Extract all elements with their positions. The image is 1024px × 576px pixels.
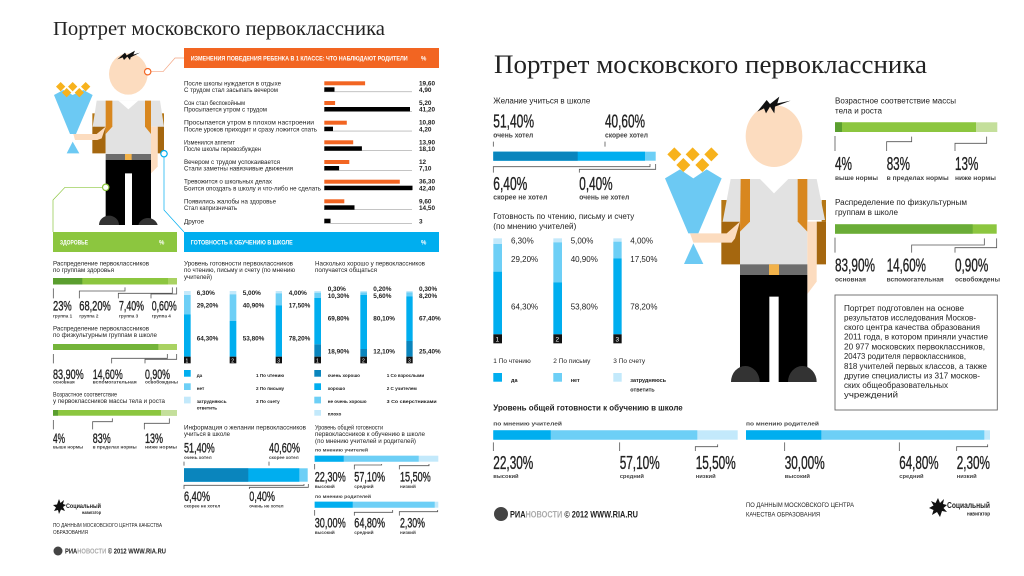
panel: desire to study right [493,96,656,202]
chart: behaviour changes bars: Стали заметны навязчивые движения [184,166,293,173]
chart: communication skills: хорошо [328,386,345,391]
illustration: right schoolboy [665,97,826,382]
panel: desire to study left: учиться в школе [184,431,231,438]
chart: literacy readiness right: ответить [630,388,655,394]
chart: behaviour changes bars: 13,90 [419,139,435,146]
panel: body mass conformity right: 4% [835,154,852,174]
chart: communication skills: 25,40% [419,348,441,356]
panel: physical education groups: основная [53,380,75,385]
panel: physical education groups right: освобождены [955,277,1000,284]
chart: literacy readiness left: да [197,373,203,378]
logo: social navigator left: навигатор [82,510,101,515]
panel: physical education groups right: вспомогательная [887,278,944,284]
chart: behaviour changes bars: После уроков приходит и сразу ложится спать [184,126,317,133]
chart: literacy readiness right: Готовность по чтению, письму и счету [493,212,634,221]
panel: overall readiness left: 2,30% [400,515,425,531]
panel: health groups: группа 4 [152,313,171,318]
chart: literacy readiness left: 17,50% [289,303,311,310]
text box: study description: Портрет подготовлен на основе [844,303,964,313]
chart: communication skills: 0,20% [373,286,392,293]
panel: desire to study left: 51,40% [184,439,215,455]
chart: literacy readiness left: 3 По счету [256,399,280,404]
panel: overall readiness left: средний [354,483,374,489]
panel: desire to study right: 0,40% [579,174,613,194]
header: readiness: ГОТОВНОСТЬ К ОБУЧЕНИЮ В ШКОЛЕ [191,240,293,246]
chart: parents opinion: высокий [785,473,810,480]
chart: literacy readiness left [184,260,311,410]
chart: communication skills: 3 [408,358,411,364]
chart: communication skills: 0,30% [419,286,437,293]
chart: communication skills: 5,60% [373,293,392,300]
chart: literacy readiness right: затрудняюсь [630,378,667,384]
logo: social navigator right [929,498,991,518]
chart: literacy readiness right: 40,90% [571,255,598,264]
chart: parents opinion: 2,30% [957,453,990,473]
chart: literacy readiness right: 1 [496,336,500,344]
panel: overall readiness left: (по мнению учителей и родителей) [315,438,416,445]
chart: teachers opinion: по мнению учителей [493,420,562,427]
chart: parents opinion: средний [899,473,924,480]
chart: behaviour changes bars: 18,10 [419,146,435,153]
panel: health groups: 7,40% [119,298,144,314]
logo: RIA left: РИАНОВОСТИ © 2012 WWW.RIA.RU [65,548,166,556]
source note left: ОБРАЗОВАНИЯ [53,530,88,536]
source note left: ПО ДАННЫМ МОСКОВСКОГО ЦЕНТРА КАЧЕСТВА [53,523,163,529]
chart: literacy readiness right: 6,30% [511,236,534,246]
chart: communication skills: 2 [362,358,365,364]
panel: desire to study left: 40,60% [269,439,300,455]
panel: desire to study right: очень не хотел [579,192,630,202]
text box: study description: учреждений [844,389,898,399]
panel: physical education groups [53,326,178,385]
header: health [53,232,177,252]
chart: teachers opinion: низкий [696,473,716,480]
panel: physical education groups: вспомогательная [93,380,137,385]
title: right panel: Портрет московского первоклассника [494,50,927,79]
panel: body mass conformity [53,392,177,450]
chart: literacy readiness right: 29,20% [511,255,538,264]
panel: health groups: 68,20% [79,298,111,314]
chart: communication skills: 2 С учителем [387,386,417,391]
panel: desire to study right: скорее хотел [605,130,648,139]
chart: behaviour changes bars: Тревожится о школьных делах [184,179,273,186]
chart: behaviour changes bars: 4,90 [419,87,432,94]
chart: teachers opinion: 22,30% [493,453,533,473]
panel: physical education groups right: 0,90% [955,256,988,276]
panel: desire to study left: очень хотел [184,455,212,460]
chart: literacy readiness left: 1 По чтению [256,373,284,378]
chart: behaviour changes bars: 14,50 [419,205,435,212]
chart: behaviour changes bars: 36,30 [419,179,435,186]
chart: behaviour changes bars: Вечером с трудом успокаивается [184,159,280,166]
illustration: left schoolboy [54,51,164,225]
chart: communication skills: 8,20% [419,293,437,300]
panel: physical education groups: Распределение первоклассников [53,326,150,333]
chart: literacy readiness left: 2 По письму [256,386,285,391]
chart: literacy readiness left: Уровень готовности первоклассников [184,260,294,268]
panel: health groups: 23% [53,298,72,314]
logo: social navigator left [53,499,101,515]
chart: behaviour changes bars: Боится опоздать в школу и что-либо не сделать [184,185,321,192]
chart: communication skills: 69,80% [328,316,350,322]
chart: behaviour changes bars: После школы нуждается в отдыхе [184,80,282,87]
chart: communication skills: 10,30% [328,293,350,300]
chart: parents opinion: низкий [957,473,977,480]
text box: study description: 20473 родителя первоклассников, [844,351,966,361]
chart: behaviour changes bars: После школы перевозбужден [184,146,261,153]
chart: literacy readiness right: 53,80% [571,302,598,312]
chart: literacy readiness left: ответить [197,406,217,410]
chart: behaviour changes bars: Сон стал беспокойным [184,100,245,107]
panel: physical education groups right: группам в школе [835,208,899,217]
panel: body mass conformity: 4% [53,430,65,446]
chart: behaviour changes bars: Просыпается утром в плохом настроении [184,120,315,127]
panel: desire to study right: 40,60% [605,111,645,131]
chart: behaviour changes bars: 19,60 [419,80,435,87]
chart: teachers opinion: 57,10% [620,453,660,473]
chart: parents opinion: по мнению родителей [746,420,819,427]
panel: overall readiness left: 15,50% [400,469,431,485]
panel: overall readiness left: низкий [400,483,416,489]
text box: study description: результатов исследования Москов- [844,312,976,322]
panel: desire to study left: скорее хотел [269,455,299,460]
panel: overall readiness left: средний [354,529,374,535]
chart: behaviour changes bars: 10,80 [419,120,435,127]
chart: behaviour changes bars: 9,60 [419,198,432,205]
source note right: КАЧЕСТВА ОБРАЗОВАНИЯ [746,512,820,518]
chart: literacy readiness right: 2 [556,336,560,344]
panel: health groups: группа 1 [53,313,73,318]
chart: behaviour changes bars: 42,40 [419,185,435,192]
chart: literacy readiness left: затрудняюсь [197,399,227,404]
chart: behaviour changes bars: 41,20 [419,107,435,114]
panel: physical education groups right: 14,60% [887,256,926,276]
panel: body mass conformity right [835,96,997,182]
header: readiness [184,232,439,252]
chart: literacy readiness left: 78,20% [289,336,311,343]
chart: literacy readiness left: 64,30% [197,336,219,343]
panel: desire to study left [184,424,308,508]
chart: parents opinion: 30,00% [785,453,825,473]
chart: parents opinion [746,420,990,480]
panel: body mass conformity right: в пределах нормы [887,176,949,182]
chart: literacy readiness right: нет [571,378,580,384]
chart: teachers opinion: 15,50% [696,453,736,473]
text box: study description: 2011 года, в котором приняли участие [844,332,988,342]
chart: teachers opinion: средний [620,473,644,480]
chart: literacy readiness left: 2 [231,358,234,364]
chart: literacy readiness left: 1 [186,358,188,364]
panel: overall readiness left: 30,00% [315,515,346,531]
text box: study description: ских общеобразовательных [844,380,949,390]
panel: body mass conformity: в пределах нормы [93,445,137,450]
panel: physical education groups: 14,60% [93,366,123,382]
chart: communication skills: плохо [328,412,341,416]
chart: behaviour changes bars: С трудом стал засыпать вечером [184,87,278,94]
panel: overall readiness left: Уровень общей готовности [315,424,383,432]
header: behaviour changes: % [421,57,427,63]
panel: overall readiness left: по мнению учителей [315,446,368,452]
chart: literacy readiness left: 3 [277,358,280,364]
panel: desire to study left: 6,40% [184,488,210,504]
panel: physical education groups right: Распределение по физкультурным [835,198,967,207]
panel: overall readiness left: высокий [315,483,335,489]
chart: literacy readiness right: (по мнению учителей) [493,222,577,231]
chart: literacy readiness right: 64,30% [511,302,538,312]
header: health: % [159,240,165,246]
chart: literacy readiness right: 2 По письму [553,358,591,365]
panel: overall readiness left: 64,80% [354,515,385,531]
panel: body mass conformity right: 13% [955,154,978,174]
panel: body mass conformity: выше нормы [53,445,83,450]
chart: literacy readiness left: 5,00% [243,290,261,297]
text box: study description: 818 учителей первых классов, а также [844,361,987,371]
panel: physical education groups right: основная [835,278,867,284]
panel: body mass conformity: ниже нормы [145,445,177,450]
chart: communication skills: 12,10% [373,348,395,356]
chart: literacy readiness right: 3 [616,336,620,344]
logo: RIA right: РИАНОВОСТИ © 2012 WWW.RIA.RU [510,510,638,520]
text box: study description [835,295,997,410]
chart: behaviour changes bars [184,80,435,225]
panel: overall readiness left: 22,30% [315,469,346,485]
panel: overall readiness left: по мнению родителей [315,493,371,499]
chart: teachers opinion [493,420,738,480]
header: behaviour changes: ИЗМЕНЕНИЯ ПОВЕДЕНИЯ РЕБЕНКА В 1 КЛАССЕ: ЧТО НАБЛЮДАЮТ РОДИТЕЛИ [191,57,408,63]
chart: behaviour changes bars: Появились жалобы на здоровье [184,198,277,205]
panel: body mass conformity right: ниже нормы [955,176,996,182]
panel: desire to study left: очень не хотел [249,504,284,508]
logo: social navigator left: Социальный [66,502,101,510]
chart: communication skills: 80,10% [373,316,395,322]
chart: parents opinion: 64,80% [899,453,939,473]
chart: literacy readiness left: 4,00% [289,290,307,297]
chart: behaviour changes bars: 3 [419,218,423,225]
panel: desire to study left: 0,40% [249,488,275,504]
chart: literacy readiness left: нет [197,386,205,391]
panel: body mass conformity: у первоклассников массы тела и роста [53,398,166,405]
panel: desire to study right: 6,40% [493,174,527,194]
chart: behaviour changes bars: Просыпается утром с трудом [184,107,267,114]
chart: behaviour changes bars: 7,10 [419,166,432,173]
panel: desire to study right: Желание учиться в школе [493,96,591,106]
text box: study description: другие специалисты из 317 москов- [844,370,980,380]
panel: overall readiness left: 57,10% [354,469,385,485]
chart: literacy readiness right: 3 По счету [613,358,646,365]
chart: literacy readiness right: 4,00% [630,236,653,246]
panel: desire to study left: скорее не хотел [184,504,220,508]
panel: body mass conformity: 83% [93,430,111,446]
panel: overall readiness left: первоклассников к обучению в школе [315,431,426,438]
chart: behaviour changes bars: Другое [184,218,205,225]
panel: physical education groups right: 83,90% [835,256,875,276]
source note right [746,502,855,518]
chart: communication skills: 0,30% [328,286,346,293]
panel: body mass conformity right: 83% [887,154,910,174]
chart: communication skills: получается общаться [315,267,377,274]
panel: desire to study right: очень хотел [493,130,534,139]
chart: literacy readiness right: 17,50% [630,255,657,264]
title: left panel: Портрет московского первоклассника [53,18,385,40]
panel: health groups [53,260,177,318]
chart: literacy readiness left: по чтению, письму и счету (по мнению [184,267,295,274]
callout: orange connector [144,58,184,75]
chart: communication skills: 1 [316,358,319,364]
text box: study description: ского центра качества образования [844,322,980,332]
chart: literacy readiness left: 53,80% [243,336,265,343]
panel: desire to study left: Информация о желании первоклассников [184,424,307,432]
panel: body mass conformity: Возрастное соответствие [53,392,117,398]
chart: literacy readiness left: 40,90% [243,303,265,310]
logo: social navigator right: Социальный [947,500,990,510]
source note right: ПО ДАННЫМ МОСКОВСКОГО ЦЕНТРА [746,502,855,509]
chart: behaviour changes bars: Изменился аппетит [184,139,235,146]
chart: communication skills: 18,90% [328,348,350,356]
chart: behaviour changes bars: 5,20 [419,100,432,107]
chart: communication skills: 1 Со взрослыми [387,373,424,378]
logo: RIA left [54,546,166,556]
panel: physical education groups: 83,90% [53,366,84,382]
chart: literacy readiness left: 29,20% [197,303,219,310]
chart: literacy readiness right: 1 По чтению [493,358,531,365]
chart: communication skills: 67,40% [419,316,441,322]
panel: physical education groups: по физкультурным группам в школе [53,332,158,339]
callout: green connector [53,184,109,232]
chart: teachers opinion: высокий [493,473,519,480]
chart: behaviour changes bars: 12 [419,159,427,166]
callout: blue connector [161,150,184,232]
panel: physical education groups: 0,90% [145,366,170,382]
panel: health groups: Распределение первоклассников [53,260,150,267]
chart: literacy readiness right: 5,00% [571,236,593,246]
panel: health groups: 0,60% [152,298,177,314]
text box: study description: 20 977 московских первоклассников, [844,342,985,352]
chart: communication skills [314,260,441,416]
panel: health groups: группа 2 [79,313,99,318]
chart: behaviour changes bars: Стал капризничать [184,205,237,212]
panel: body mass conformity: 13% [145,430,163,446]
panel: body mass conformity right: Возрастное соответствие массы [835,96,956,106]
chart: literacy readiness left: 6,30% [197,290,215,297]
logo: RIA right [494,507,638,521]
chart: communication skills: Насколько хорошо у первоклассников [315,260,426,268]
chart: literacy readiness right: да [511,378,518,384]
chart: literacy readiness right: 78,20% [630,302,657,312]
header: readiness: % [421,240,427,246]
panel: health groups: группа 3 [119,313,139,318]
heading: overall readiness: Уровень общей готовности к обучению в школе [493,402,683,412]
chart: literacy readiness right [493,212,667,394]
chart: literacy readiness left: учителей) [184,274,212,281]
panel: desire to study right: скорее не хотел [493,192,548,202]
panel: health groups: по группам здоровья [53,267,114,274]
panel: overall readiness left: высокий [315,529,335,535]
header: health: ЗДОРОВЬЕ [60,240,88,246]
header: behaviour changes [184,48,439,68]
panel: physical education groups: освобождены [145,379,178,385]
chart: communication skills: не очень хорошо [328,399,367,404]
panel: body mass conformity right: выше нормы [835,176,878,182]
panel: overall readiness left [315,424,438,535]
source note left [53,523,163,536]
panel: body mass conformity right: тела и роста [835,106,883,116]
logo: social navigator right: навигатор [967,512,991,518]
panel: overall readiness left: низкий [400,529,416,535]
chart: communication skills: очень хорошо [328,373,360,378]
panel: desire to study right: 51,40% [493,111,534,131]
chart: communication skills: 3 Со сверстниками [387,399,437,404]
chart: behaviour changes bars: 4,20 [419,126,432,133]
panel: physical education groups right [835,198,1000,284]
